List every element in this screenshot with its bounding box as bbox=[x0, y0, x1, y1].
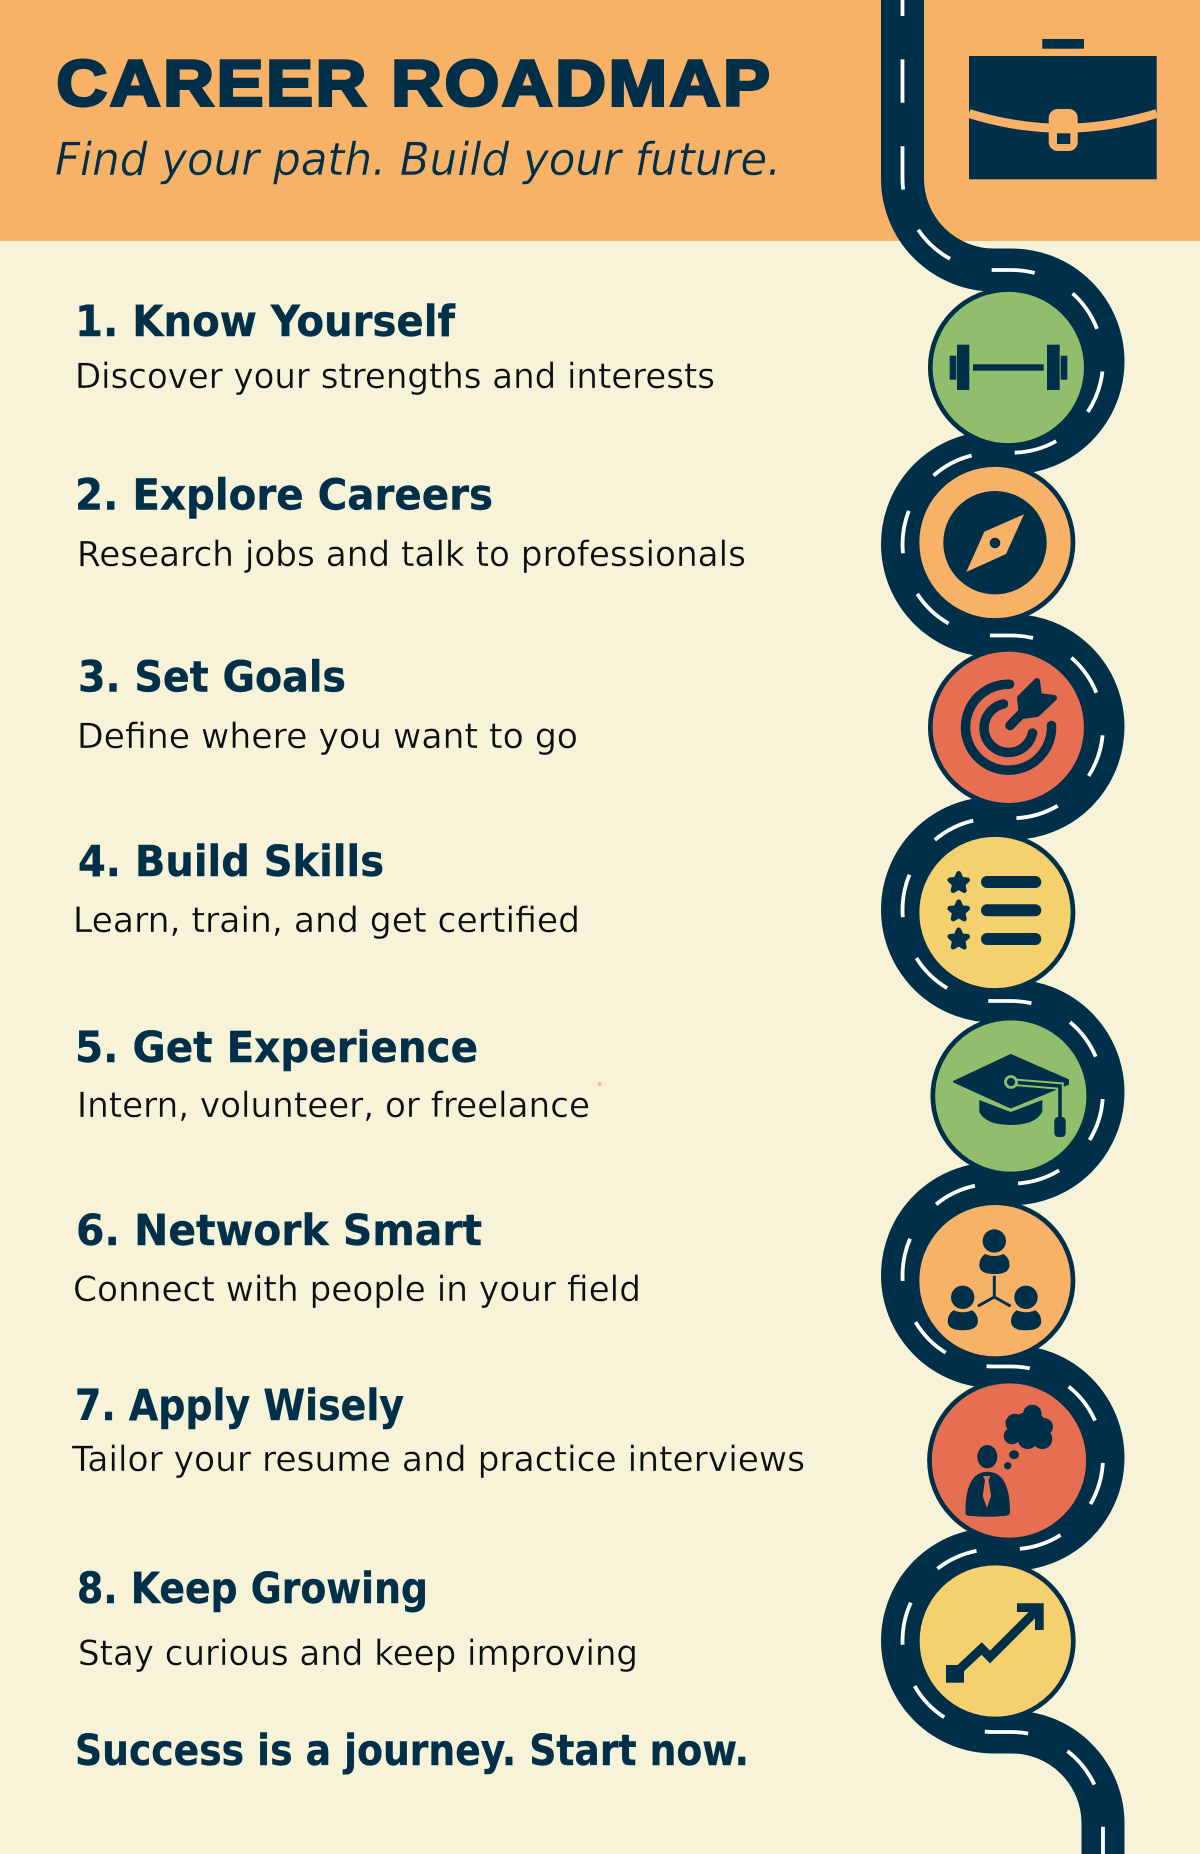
icon circle 1: dumbbell bbox=[930, 290, 1086, 446]
step 2 text: 2. Explore Careers bbox=[75, 470, 493, 520]
step 2 text bbox=[75, 470, 746, 575]
icon circle 4: star checklist bbox=[917, 834, 1073, 990]
step 3 text: Define where you want to go bbox=[77, 717, 578, 757]
step 6 text: 6. Network Smart bbox=[76, 1206, 482, 1256]
step 8 text bbox=[77, 1564, 638, 1674]
winding road bbox=[902, 0, 1103, 1854]
step 4 text: Learn, train, and get certified bbox=[73, 901, 580, 941]
step 6 text bbox=[73, 1206, 641, 1310]
closing line: Success is a journey. Start now. bbox=[75, 1726, 749, 1776]
step 8 text: Stay curious and keep improving bbox=[78, 1634, 638, 1674]
step 1 text: 1. Know Yourself bbox=[75, 297, 456, 347]
icon circle 2: compass bbox=[917, 464, 1073, 620]
subtitle: Find your path. Build your future. bbox=[55, 133, 781, 186]
step 2 text: Research jobs and talk to professionals bbox=[77, 535, 746, 575]
icon circle 3: target bbox=[930, 649, 1086, 805]
title: CAREER ROADMAP bbox=[56, 48, 773, 120]
step 5 text: 5. Get Experience bbox=[75, 1023, 478, 1073]
step 1 text bbox=[75, 297, 715, 397]
step 7 text: 7. Apply Wisely bbox=[75, 1381, 404, 1431]
step 1 text: Discover your strengths and interests bbox=[75, 357, 715, 397]
header band bbox=[0, 0, 1200, 241]
step 5 text: Intern, volunteer, or freelance bbox=[77, 1086, 590, 1126]
icon circle 8: growth arrow bbox=[917, 1563, 1073, 1719]
icon: briefcase bbox=[969, 39, 1157, 179]
icon circle 6: network of people bbox=[917, 1203, 1073, 1359]
step 4 text bbox=[73, 837, 580, 941]
step 3 text bbox=[77, 652, 578, 757]
icon circle 7: person thinking bbox=[930, 1381, 1088, 1540]
step 5 text bbox=[75, 1023, 590, 1126]
step 8 text: 8. Keep Growing bbox=[77, 1564, 428, 1614]
step 4 text: 4. Build Skills bbox=[78, 837, 384, 887]
step 7 text: Tailor your resume and practice interviews bbox=[71, 1440, 805, 1480]
step 3 text: 3. Set Goals bbox=[78, 652, 346, 702]
icon circle 5: graduation cap bbox=[933, 1018, 1089, 1174]
step 7 text bbox=[71, 1381, 805, 1480]
step 6 text: Connect with people in your field bbox=[73, 1270, 641, 1310]
